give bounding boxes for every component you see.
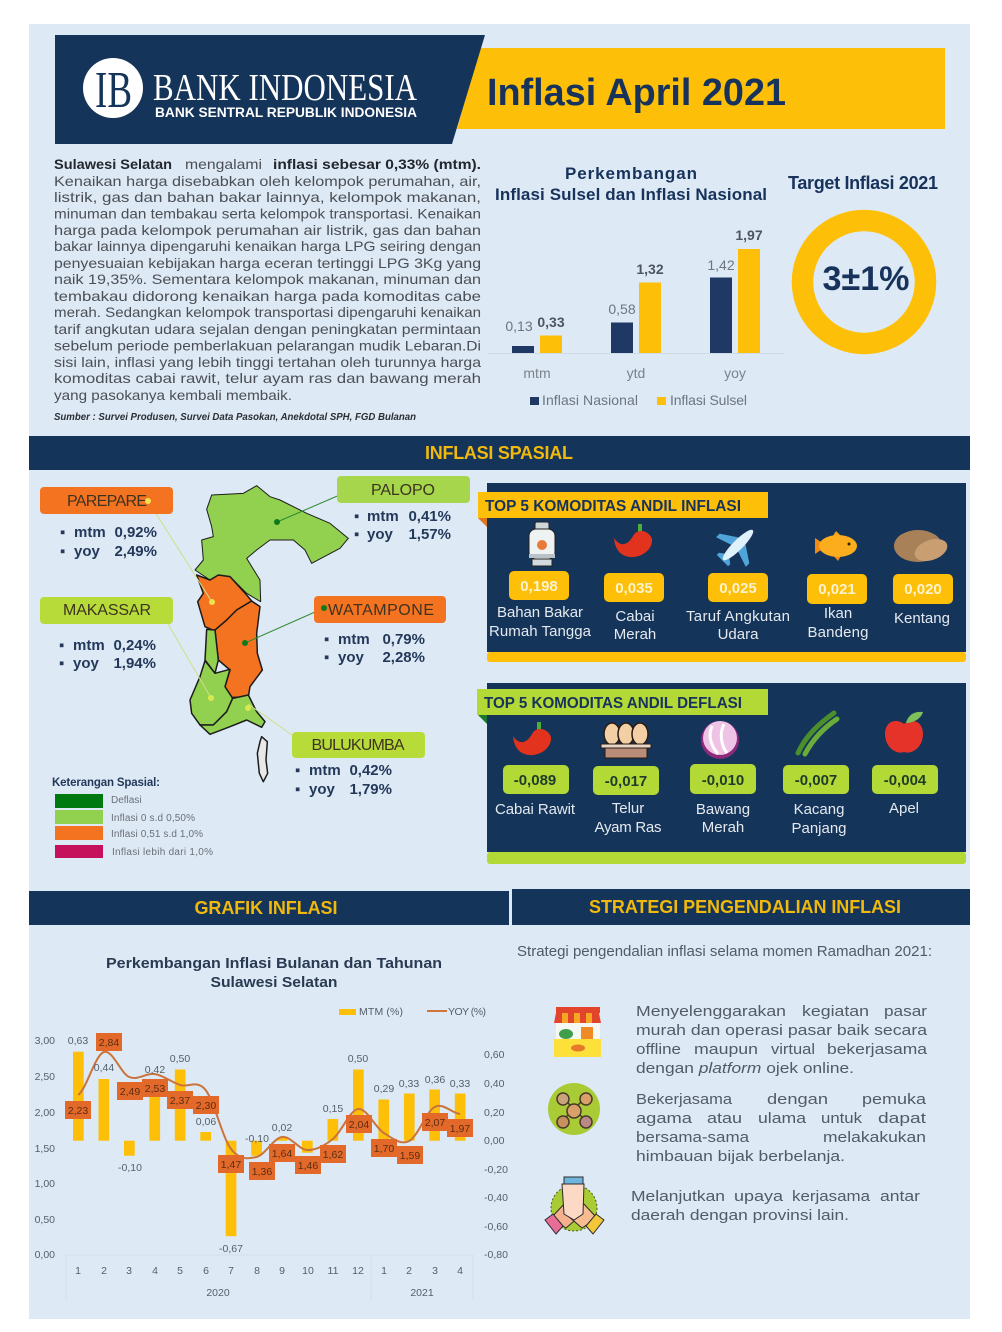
region callout: Parepare: yoy — [74, 543, 101, 560]
icon: joined hands — [545, 1177, 604, 1234]
left axis: 1,50 — [35, 1143, 55, 1155]
summary text block: Sulawesi Selatan — [54, 156, 172, 172]
icon: shallot — [701, 721, 739, 759]
region callout: Parepare: ▪ — [60, 524, 65, 541]
strategy item: religious leaders: Bekerjasama — [636, 1091, 733, 1108]
target inflation ring: Target Inflasi 2021 — [788, 173, 938, 193]
right axis: 0,60 — [484, 1049, 505, 1061]
month and year axis: 2 — [101, 1265, 107, 1277]
map legend: Inflasi 0,51 s.d 1,0% — [111, 829, 203, 840]
strategy item: market operations: murah dan operasi pasar baik secara — [636, 1022, 928, 1039]
bar chart: national vs sulsel inflation: 0,33 — [537, 314, 565, 330]
month and year axis: 5 — [177, 1265, 183, 1277]
bar chart: national vs sulsel inflation: 1,97 — [735, 227, 763, 243]
target inflation ring: 3±1% — [822, 260, 910, 298]
value chips — [509, 571, 953, 604]
left axis: 2,50 — [35, 1071, 55, 1083]
MTM value labels: -0,10 — [245, 1133, 269, 1145]
strategy item: market operations: offline — [636, 1041, 681, 1058]
YOY value labels: 1,59 — [400, 1150, 420, 1162]
region callout: Bulukumba: ▪ — [295, 781, 300, 798]
region callout: Watampone: ▪ — [324, 649, 329, 666]
strategy item: religious leaders: pemuka — [862, 1091, 927, 1108]
month and year axis: 3 — [432, 1265, 438, 1277]
strategy item: inter-regional cooperation: Melanjutkan — [631, 1188, 725, 1205]
MTM value labels: 0,50 — [170, 1053, 190, 1065]
logo panel: IB — [95, 62, 132, 119]
region callout: Watampone — [314, 596, 446, 666]
strategy item: inter-regional cooperation: kerjasama — [792, 1188, 871, 1205]
month and year axis: 6 — [203, 1265, 209, 1277]
strategy item: inter-regional cooperation — [545, 1177, 920, 1234]
YOY value labels: 2,04 — [349, 1119, 369, 1131]
YOY value labels: 2,53 — [145, 1083, 165, 1095]
icon: gas cylinder — [529, 522, 555, 566]
map legend: Keterangan Spasial: — [52, 777, 160, 789]
YOY value labels — [65, 1033, 473, 1180]
region callout: Makassar: yoy — [73, 655, 100, 672]
title ribbon: Inflasi April 2021 — [487, 72, 786, 114]
month and year axis: 4 — [457, 1265, 463, 1277]
ribbon heading: TOP 5 KOMODITAS ANDIL INFLASI — [485, 498, 741, 515]
summary text block: minuman dan tembakau serta kelompok transportasi. Kenaikan — [54, 206, 481, 222]
commodity labels: Merah — [702, 819, 744, 836]
commodity labels: Kentang — [894, 610, 950, 627]
strategy item: market operations: kegiatan — [802, 1003, 869, 1020]
YOY value labels: 2,37 — [170, 1095, 190, 1107]
region callout: Bulukumba — [292, 732, 425, 798]
icon: long beans — [798, 713, 837, 754]
strategy item: market operations: pasar — [884, 1003, 927, 1020]
YOY value labels: 2,30 — [196, 1100, 216, 1112]
strategy item: market operations: bekerjasama — [827, 1041, 928, 1058]
right axis: -0,40 — [484, 1192, 508, 1204]
ribbon heading — [478, 492, 768, 527]
region callout: Watampone: ▪ — [324, 631, 329, 648]
YOY value labels: 2,49 — [120, 1086, 140, 1098]
commodity labels — [489, 604, 950, 643]
left axis: 2,00 — [35, 1107, 55, 1119]
bar chart: national vs sulsel inflation — [488, 164, 785, 408]
month and year axis: 11 — [328, 1265, 339, 1277]
region callout: Bulukumba: ▪ — [295, 762, 300, 779]
month and year axis: 3 — [126, 1265, 132, 1277]
summary text block: penyesuaian kebijakan harga eceran tertinggi LPG 3Kg yang — [54, 255, 481, 271]
bar chart: national vs sulsel inflation: Perkembangan — [565, 164, 697, 183]
icon: community network — [548, 1083, 600, 1135]
logo panel: BANK INDONESIA — [153, 67, 417, 109]
bar chart: national vs sulsel inflation: ytd — [627, 365, 645, 381]
month and year axis: 2 — [406, 1265, 412, 1277]
region callout: Watampone: 0,79% — [382, 631, 425, 648]
YOY value labels: 1,97 — [450, 1123, 470, 1135]
strategy item: religious leaders: dengan — [767, 1091, 828, 1108]
section heading: grafik inflasi: GRAFIK INFLASI — [194, 898, 338, 918]
YOY value labels: 1,64 — [272, 1148, 292, 1160]
bar chart: national vs sulsel inflation: mtm — [523, 365, 551, 381]
right axis: 0,40 — [484, 1078, 505, 1090]
combo chart: monthly and yearly inflation: Sulawesi Selatan — [210, 974, 338, 991]
commodity labels: Ayam Ras — [594, 819, 662, 836]
region callout: Watampone: WATAMPONE — [328, 602, 434, 619]
bar chart: national vs sulsel inflation: 0,13 — [505, 318, 533, 334]
commodity labels: Cabai Rawit — [495, 801, 576, 818]
map legend — [52, 777, 213, 858]
value chips: 0,021 — [818, 581, 856, 598]
strategy item: inter-regional cooperation: daerah dengan provinsi lain. — [631, 1207, 849, 1224]
commodity labels: Telur — [612, 800, 644, 817]
MTM value labels: 0,02 — [272, 1122, 292, 1134]
region callout: Palopo: ▪ — [354, 526, 359, 543]
commodity labels: Udara — [718, 626, 759, 643]
commodity labels: Bawang — [696, 801, 750, 818]
region callout: Watampone: mtm — [338, 631, 370, 648]
target inflation ring — [788, 173, 938, 344]
ribbon heading — [477, 689, 768, 724]
icon: egg tray — [601, 723, 651, 758]
spatial map of South Sulawesi — [148, 485, 359, 782]
MTM value labels: 0,33 — [450, 1078, 470, 1090]
MTM value labels: 0,44 — [94, 1062, 114, 1074]
summary text block — [54, 156, 481, 423]
logo panel — [55, 35, 485, 144]
region callout: Palopo: 0,41% — [408, 508, 451, 525]
strategy item: market operations: dengan platform ojek online. — [636, 1060, 854, 1077]
YOY value labels: 1,70 — [374, 1143, 394, 1155]
MTM value labels: -0,10 — [118, 1162, 142, 1174]
strategy item: religious leaders: melakakukan — [823, 1129, 926, 1146]
region callout: Makassar: MAKASSAR — [63, 602, 151, 619]
month and year axis: 7 — [228, 1265, 234, 1277]
YOY value labels: 1,36 — [252, 1166, 272, 1178]
month and year axis: 1 — [75, 1265, 81, 1277]
region callout: Bulukumba: 1,79% — [349, 781, 392, 798]
section heading: strategi pengendalian inflasi — [512, 889, 970, 925]
MTM value labels: 0,15 — [323, 1103, 343, 1115]
strategy item: inter-regional cooperation: upaya — [734, 1188, 784, 1205]
map legend: Inflasi lebih dari 1,0% — [112, 847, 213, 858]
right axis: -0,60 — [484, 1221, 508, 1233]
summary text block: Kenaikan harga disebabkan oleh kelompok perumahan, air, — [54, 173, 481, 189]
region callout: Makassar: 1,94% — [113, 655, 156, 672]
value chips: -0,010 — [702, 772, 744, 789]
month and year axis — [66, 1255, 473, 1300]
value chips: 0,020 — [904, 581, 942, 598]
month and year axis: 1 — [381, 1265, 387, 1277]
bar chart: national vs sulsel inflation: 1,42 — [707, 257, 735, 273]
region callout: Makassar — [40, 597, 173, 672]
value chips: -0,017 — [605, 773, 647, 790]
strategy item: market operations: maupun — [694, 1041, 758, 1058]
summary text block: naik 19,35%. Sementara kelompok makanan, minuman dan — [54, 271, 481, 287]
value chips: 0,035 — [615, 580, 653, 597]
month and year axis: 12 — [352, 1265, 364, 1277]
summary text block: mengalami — [185, 156, 262, 172]
section heading: grafik inflasi — [29, 891, 509, 925]
region callout: Makassar: mtm — [73, 637, 105, 654]
region callout: Makassar: ▪ — [59, 637, 64, 654]
strategy item: market operations — [554, 1003, 928, 1077]
strategy item: religious leaders: untuk — [821, 1110, 863, 1127]
strategy item: religious leaders: himbauan bijak berbelanja. — [636, 1148, 845, 1165]
month and year axis: 10 — [302, 1265, 314, 1277]
region callout: Watampone: 2,28% — [382, 649, 425, 666]
commodity labels: Bahan Bakar — [497, 604, 583, 621]
commodity labels — [495, 800, 919, 837]
MTM value labels — [68, 1035, 470, 1255]
icon: apple — [885, 712, 923, 753]
month and year axis: 9 — [279, 1265, 285, 1277]
left axis: 0,50 — [35, 1214, 55, 1226]
summary text block: harga pada kelompok perumahan air listrik, gas dan bahan — [54, 222, 481, 238]
commodity labels: Bandeng — [808, 624, 868, 641]
strategy item: religious leaders: dapat — [878, 1110, 927, 1127]
icon: red chili — [614, 524, 652, 557]
commodity labels: Taruf Angkutan — [686, 608, 790, 625]
region callout: Palopo: ▪ — [354, 508, 359, 525]
section heading: inflasi spasial: INFLASI SPASIAL — [425, 443, 573, 463]
YOY value labels: 2,07 — [425, 1117, 445, 1129]
summary text block: bakar lainnya dipengaruhi kenaikan harga LPG seiring dengan — [54, 238, 481, 254]
source note: Sumber : Survei Produsen, Survei Data Pasokan, Anekdotal SPH, FGD Bulanan — [54, 412, 416, 423]
region callout: Bulukumba: mtm — [309, 762, 341, 779]
strategy item: religious leaders: agama — [636, 1110, 693, 1127]
YOY value labels: 1,62 — [323, 1149, 343, 1161]
commodity labels: Cabai — [615, 608, 655, 625]
commodity labels: Apel — [889, 800, 919, 817]
icon: potato — [894, 530, 950, 565]
value chips: 0,198 — [520, 578, 558, 595]
region callout: Parepare: 0,92% — [114, 524, 157, 541]
summary text block: tembakau didorong kenaikan harga pada komoditas cabe — [54, 288, 481, 304]
YOY value labels: 2,23 — [68, 1105, 88, 1117]
strategy item: inter-regional cooperation: antar — [880, 1188, 920, 1205]
value chips: 0,025 — [719, 580, 757, 597]
region callout: Parepare: mtm — [74, 524, 106, 541]
region callout: Parepare — [40, 487, 173, 560]
region callout: Palopo: mtm — [367, 508, 399, 525]
MTM value labels: 0,36 — [425, 1074, 445, 1086]
section heading: inflasi spasial — [29, 436, 970, 470]
region callout: Bulukumba: 0,42% — [349, 762, 392, 779]
region callout: Parepare: ▪ — [60, 543, 65, 560]
bar chart: national vs sulsel inflation: 0,58 — [608, 301, 636, 317]
month and year axis: 2020 — [206, 1287, 230, 1299]
commodity labels: Rumah Tangga — [489, 623, 592, 640]
MTM value labels: 0,33 — [399, 1078, 419, 1090]
month and year axis: 8 — [254, 1265, 260, 1277]
chart legend: Inflasi Nasional — [542, 392, 638, 408]
right axis: -0,20 — [484, 1164, 508, 1176]
region callout: Palopo: PALOPO — [371, 482, 435, 499]
month and year axis: 4 — [152, 1265, 158, 1277]
right axis: 0,00 — [484, 1135, 505, 1147]
MTM value labels: 0,42 — [145, 1064, 165, 1076]
YOY value labels: 2,84 — [99, 1037, 119, 1049]
region callout: Parepare: PAREPARE — [67, 493, 147, 510]
header banner — [55, 35, 945, 144]
bar chart: national vs sulsel inflation: Inflasi Sulsel dan Inflasi Nasional — [495, 185, 767, 204]
strategy item: market operations: Menyelenggarakan — [636, 1003, 786, 1020]
chart legend — [530, 392, 747, 408]
strategy item: religious leaders — [548, 1083, 927, 1165]
region callout: Palopo: 1,57% — [408, 526, 451, 543]
MTM bars — [73, 1052, 466, 1236]
summary text block: sisi lain, inflasi yang lebih tinggi tertahan oleh turunnya harga — [54, 354, 481, 370]
value chips: -0,004 — [884, 772, 927, 789]
commodity labels: Kacang — [794, 801, 844, 818]
icon: fish — [815, 531, 857, 561]
MTM value labels: 0,06 — [196, 1116, 216, 1128]
region callout: Bulukumba: BULUKUMBA — [312, 737, 405, 754]
panel: top 5 deflation commodities — [477, 683, 966, 864]
icon: airplane — [708, 515, 768, 575]
month and year axis: 2021 — [410, 1287, 434, 1299]
summary text block: yang pasokanya kembali membaik. — [54, 387, 292, 403]
strategy item: religious leaders: ulama — [758, 1110, 807, 1127]
bar chart: national vs sulsel inflation: yoy — [724, 365, 746, 381]
value chips: -0,089 — [514, 772, 556, 789]
region callout: Palopo — [337, 476, 470, 543]
MTM value labels: 0,63 — [68, 1035, 88, 1047]
MTM value labels: 0,50 — [348, 1053, 368, 1065]
logo panel: BANK SENTRAL REPUBLIK INDONESIA — [155, 105, 417, 120]
chart legend: MTM (%) — [359, 1006, 403, 1018]
title ribbon — [457, 48, 945, 129]
summary text block: tarif angkutan udara sejalan dengan peningkatan permintaan — [54, 321, 481, 337]
value chips — [503, 764, 938, 795]
region callout: Watampone: yoy — [338, 649, 365, 666]
commodity labels: Panjang — [791, 820, 847, 837]
chart legend: Inflasi Sulsel — [670, 392, 747, 408]
left axis — [35, 1035, 55, 1261]
left axis: 0,00 — [35, 1249, 55, 1261]
YOY value labels: 1,47 — [221, 1159, 241, 1171]
region callout: Palopo: yoy — [367, 526, 394, 543]
icon: red chili — [513, 722, 551, 755]
right axis — [484, 1049, 508, 1261]
summary text block: komoditas cabai rawit, telur ayam ras dan bawang merah — [54, 370, 481, 386]
combo chart: monthly and yearly inflation: Perkembangan Inflasi Bulanan dan Tahunan — [106, 955, 442, 972]
panel: top 5 inflation commodities — [478, 483, 966, 662]
combo chart: monthly and yearly inflation — [35, 955, 508, 1300]
value chips: -0,007 — [795, 772, 837, 789]
chart legend — [339, 1006, 486, 1018]
strategy item: religious leaders: atau — [707, 1110, 742, 1127]
strategy intro text: Strategi pengendalian inflasi selama momen Ramadhan 2021: — [517, 943, 932, 960]
bar chart: national vs sulsel inflation: 1,32 — [636, 261, 664, 277]
left axis: 3,00 — [35, 1035, 55, 1047]
YOY line — [78, 1052, 460, 1158]
MTM value labels: -0,67 — [219, 1243, 243, 1255]
section heading: strategi pengendalian inflasi: STRATEGI PENGENDALIAN INFLASI — [589, 897, 901, 917]
map legend: Inflasi 0 s.d 0,50% — [111, 813, 195, 824]
YOY value labels: 1,46 — [298, 1160, 318, 1172]
summary text block: inflasi sebesar 0,33% (mtm). — [273, 156, 481, 172]
region callout: Parepare: 2,49% — [114, 543, 157, 560]
summary text block: sebelum periode pemberlakuan pelarangan mudik Lebaran.Di — [54, 338, 481, 354]
right axis: 0,20 — [484, 1107, 505, 1119]
region callout: Makassar: 0,24% — [113, 637, 156, 654]
region callout: Makassar: ▪ — [59, 655, 64, 672]
strategy item: market operations: virtual — [771, 1041, 815, 1058]
left axis: 1,00 — [35, 1178, 55, 1190]
map legend: Deflasi — [111, 795, 142, 806]
strategy item: religious leaders: bersama-sama — [636, 1129, 750, 1146]
commodity labels: Merah — [614, 626, 656, 643]
ribbon heading: TOP 5 KOMODITAS ANDIL DEFLASI — [484, 695, 742, 712]
commodity labels: Ikan — [824, 605, 852, 622]
right axis: -0,80 — [484, 1249, 508, 1261]
chart legend: YOY (%) — [448, 1006, 486, 1018]
MTM value labels: 0,29 — [374, 1083, 394, 1095]
region callout: Bulukumba: yoy — [309, 781, 336, 798]
summary text block: listrik, gas dan bahan bakar lainnya, kelompok makanan, — [54, 189, 481, 205]
summary text block: merah. Sedangkan kelompok transportasi dipengaruhi kenaikan — [54, 304, 481, 320]
icon: market stall — [554, 1007, 601, 1057]
